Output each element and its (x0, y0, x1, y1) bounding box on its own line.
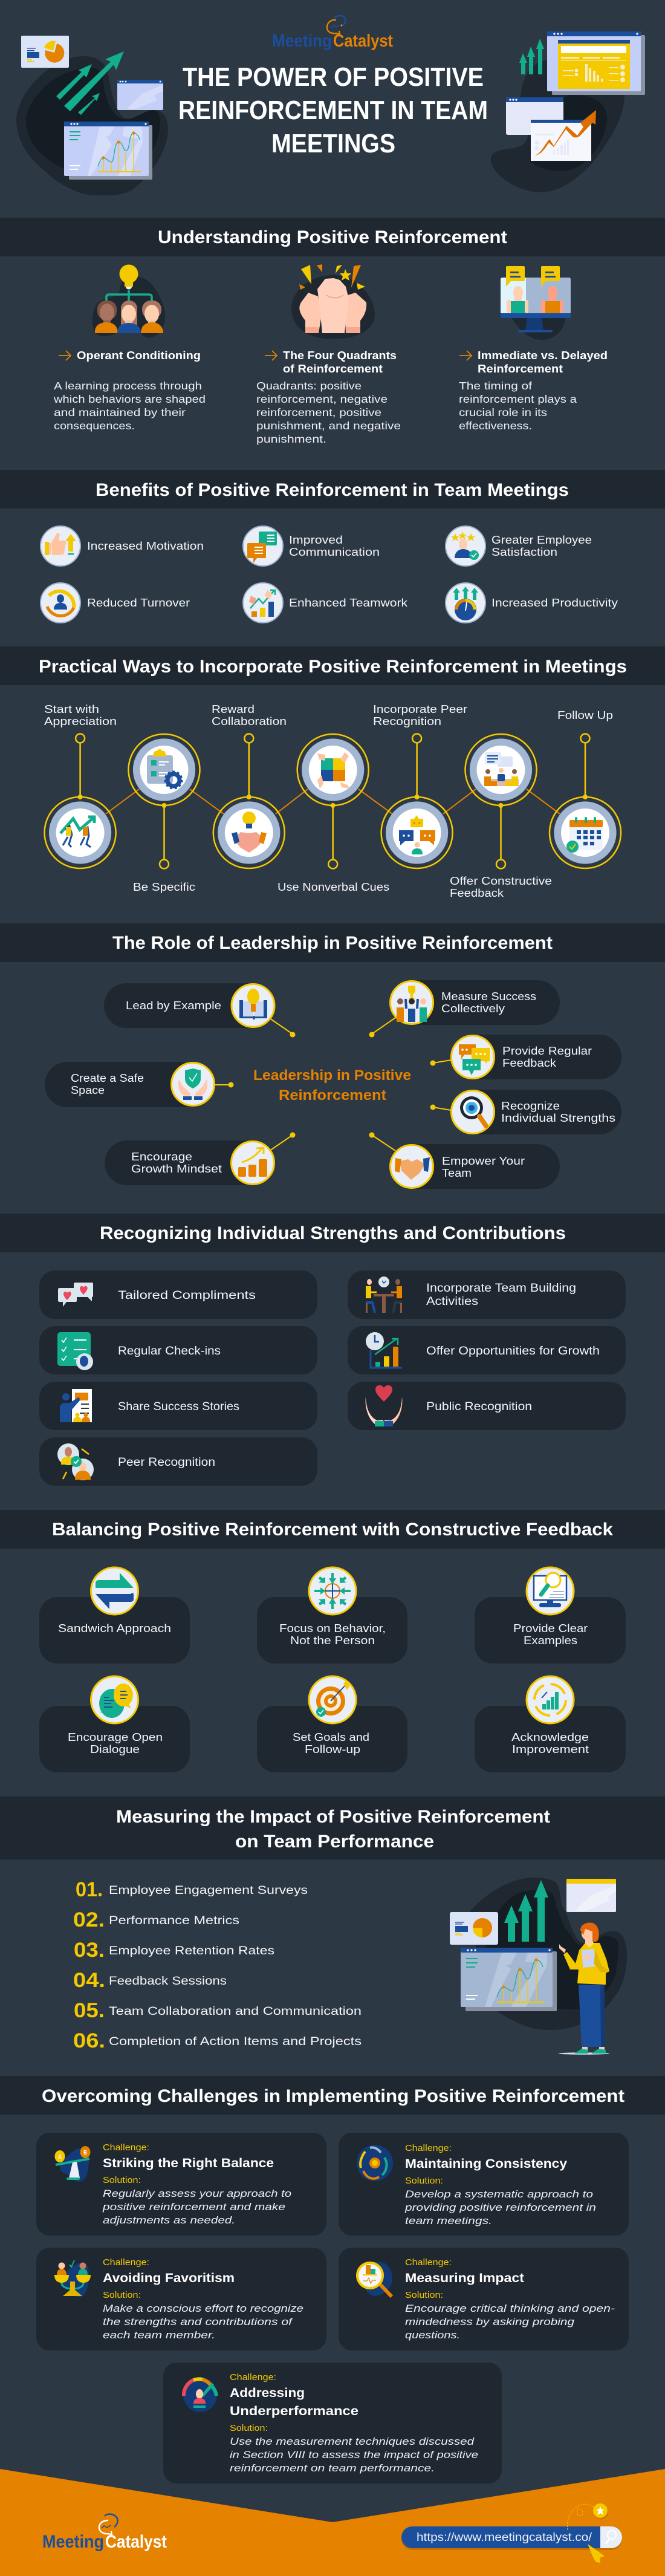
logo: Meeting Catalyst: Meeting (272, 31, 332, 51)
list item 06: 06. (73, 2029, 105, 2052)
footer band (0, 2469, 665, 2576)
card: Maintaining Consistency: Maintaining Consistency (405, 2157, 567, 2171)
icon: balance scale: A (58, 2154, 62, 2161)
icon: balance scale (54, 2146, 91, 2182)
list item 02: Performance Metrics (109, 1914, 239, 1927)
section: Practical Ways (0, 646, 665, 899)
benefit label: Greater Employee (491, 534, 592, 546)
list item 05 (74, 1999, 362, 2022)
list item 06: Completion of Action Items and Projects (109, 2035, 362, 2048)
card: Striking the Right Balance (36, 2133, 326, 2236)
card: Encourage Open Dialogue (39, 1676, 190, 1772)
node: Offer Constructive Feedback (465, 734, 537, 805)
card: Encourage Open Dialogue: Dialogue (90, 1743, 140, 1755)
list item 05: 05. (74, 1999, 105, 2022)
center label: Reinforcement (279, 1087, 386, 1104)
text block: The Four Quadrants of Reinforcement: punishment, and negative (256, 420, 401, 432)
center label (253, 1067, 411, 1104)
benefit label: Increased Productivity (491, 597, 618, 609)
connectors (215, 1018, 451, 1151)
card: Measuring Impact: Challenge: (405, 2257, 452, 2268)
text block: Immediate vs. Delayed Reinforcement: crucial role in its (459, 406, 547, 418)
text block: The Four Quadrants of Reinforcement: punishment. (256, 433, 326, 445)
pill: Encourage Growth Mindset: Growth Mindset (131, 1163, 222, 1175)
list item 05: Team Collaboration and Communication (109, 2005, 362, 2018)
pill: Encourage Growth Mindset (105, 1140, 274, 1185)
footer logo (42, 2514, 167, 2552)
benefit: Improved Communication (243, 526, 283, 566)
card: Addressing Underperformance: Addressing (230, 2386, 305, 2400)
text block: The Four Quadrants of Reinforcement (256, 350, 401, 445)
card: Maintaining Consistency (339, 2133, 629, 2236)
card: Addressing Underperformance: Challenge: (230, 2372, 276, 2382)
footer logo: Meeting (42, 2532, 104, 2552)
footer logo: Catalyst (105, 2532, 167, 2552)
text block: Operant Conditioning: Operant Conditioning (77, 350, 201, 362)
icon: cycle (357, 2145, 393, 2181)
card: Measuring Impact: questions. (405, 2329, 460, 2341)
benefit label: Increased Motivation (87, 540, 204, 552)
card: Avoiding Favoritism: each team member. (103, 2329, 215, 2341)
card: Tailored Compliments: Tailored Compliments (118, 1289, 256, 1302)
pill: Empower Your Team: Team (442, 1167, 472, 1179)
text block: The Four Quadrants of Reinforcement: of Reinforcement (283, 363, 383, 375)
card: Offer Opportunities for Growth (348, 1326, 626, 1374)
list item 03 (74, 1939, 274, 1962)
heading: Understanding Positive Reinforcement (158, 227, 507, 247)
pill: Create a Safe Space: Space (71, 1084, 105, 1096)
icon: scales with people (54, 2260, 91, 2297)
node: Incorporate Peer Recognition (381, 797, 453, 868)
card: Acknowledge Improvement (475, 1676, 626, 1772)
labels above: Collaboration (212, 715, 287, 727)
heading: The Role of Leadership in Positive Reinforcement (112, 933, 553, 953)
logo: Meeting Catalyst: Catalyst (333, 31, 393, 51)
node: Start with Appreciation (45, 797, 116, 868)
benefit label (289, 534, 380, 558)
icon: cursor (588, 2544, 605, 2563)
card: Incorporate Team Building Activities: Activities (426, 1295, 478, 1308)
labels below: Use Nonverbal Cues (277, 881, 389, 893)
heading: Balancing Positive Reinforcement with Constructive Feedback (52, 1520, 613, 1540)
text block: The Four Quadrants of Reinforcement: reinforcement, positive (256, 406, 381, 418)
list item 01: 01. (76, 1878, 103, 1901)
arrow (265, 351, 277, 360)
section: The Role of Leadership (0, 923, 665, 1189)
benefit label (491, 534, 592, 558)
pill: Encourage Growth Mindset: Encourage (131, 1151, 192, 1163)
section: Benefits of Positive Reinforcement (0, 470, 665, 623)
card: Offer Opportunities for Growth: Offer Opportunities for Growth (426, 1345, 600, 1358)
icon: balance scale: B (83, 2150, 87, 2156)
text block: Operant Conditioning: and maintained by their (54, 406, 186, 418)
labels above: Start with (44, 703, 99, 715)
card: Peer Recognition: Peer Recognition (118, 1456, 215, 1469)
pill: Create a Safe Space (45, 1062, 214, 1107)
logo: Meeting Catalyst (272, 16, 393, 51)
card: Focus on Behavior: Not the Person (290, 1634, 375, 1647)
labels above: Reward (212, 703, 255, 715)
title: THE POWER OF POSITIVE (183, 62, 484, 92)
list item 06 (73, 2029, 362, 2052)
card: Sandwich Approach (39, 1567, 190, 1664)
card: Striking the Right Balance: positive reinforcement and make (102, 2201, 285, 2213)
section: Recognizing Individual Strengths (0, 1214, 665, 1486)
card: Incorporate Team Building Activities: Incorporate Team Building (426, 1282, 576, 1295)
card: Avoiding Favoritism: the strengths and contributions of (103, 2316, 294, 2327)
hero illustration: right charts (491, 31, 645, 192)
pill: Empower Your Team: Empower Your (442, 1155, 525, 1167)
card: Encourage Open Dialogue: Encourage Open (68, 1731, 163, 1743)
pill: Provide Regular Feedback (451, 1035, 621, 1079)
list item 04: Feedback Sessions (109, 1975, 227, 1988)
section: Overcoming Challenges (0, 2076, 665, 2350)
text block: Immediate vs. Delayed Reinforcement (459, 350, 608, 432)
hero illustration: left charts (16, 36, 168, 195)
timeline connectors (76, 734, 590, 868)
section: Understanding Positive Reinforcement (0, 218, 665, 445)
pill: Measure Success Collectively: Collectively (441, 1003, 505, 1015)
benefit label: Improved (289, 534, 343, 546)
icon: video meeting monitor (501, 266, 571, 340)
card: Provide Clear Examples: Provide Clear (513, 1622, 588, 1634)
title: REINFORCEMENT IN TEAM (178, 96, 488, 125)
text block: The Four Quadrants of Reinforcement: The Four Quadrants (283, 350, 397, 362)
node: Use Nonverbal Cues (297, 734, 369, 805)
labels above: Incorporate Peer (373, 703, 467, 715)
website search bar (401, 2503, 622, 2563)
heading: Recognizing Individual Strengths and Contributions (100, 1223, 566, 1243)
card: Addressing Underperformance: Solution: (230, 2423, 268, 2433)
text block: Immediate vs. Delayed Reinforcement: Reinforcement (478, 363, 563, 375)
list item 04: 04. (73, 1969, 105, 1992)
title: MEETINGS (271, 129, 395, 158)
list item 03: 03. (74, 1939, 105, 1962)
card: Tailored Compliments (39, 1270, 317, 1319)
card: Provide Clear Examples (475, 1567, 626, 1664)
card: Public Recognition: Public Recognition (426, 1400, 532, 1413)
pill: Measure Success Collectively: Measure Success (441, 990, 536, 1003)
arrow (59, 351, 71, 360)
labels below (133, 875, 552, 899)
text block: Immediate vs. Delayed Reinforcement: reinforcement plays a (459, 393, 577, 405)
list item 03: Employee Retention Rates (109, 1945, 274, 1957)
card: Share Success Stories: Share Success Stories (118, 1400, 239, 1413)
heading: Benefits of Positive Reinforcement in Team Meetings (96, 480, 569, 500)
labels above (44, 703, 613, 727)
card: Striking the Right Balance: Regularly assess your approach to (103, 2188, 291, 2199)
pill: Lead by Example: Lead by Example (126, 1000, 221, 1012)
card: Avoiding Favoritism: Avoiding Favoritism (103, 2271, 235, 2285)
card: Maintaining Consistency: Develop a systematic approach to (405, 2188, 593, 2200)
pill: Measure Success Collectively (390, 980, 560, 1025)
text block: Operant Conditioning: consequences. (54, 420, 135, 432)
pill: Recognize Individual Strengths (451, 1090, 621, 1134)
card: Measuring Impact: Measuring Impact (405, 2271, 524, 2285)
card: Regular Check-ins (39, 1326, 317, 1374)
card: Avoiding Favoritism: Challenge: (103, 2257, 149, 2268)
card: Measuring Impact: Encourage critical thinking and open- (405, 2303, 615, 2314)
card: Addressing Underperformance (163, 2363, 502, 2483)
pill: Empower Your Team (390, 1144, 560, 1189)
card: Maintaining Consistency: Challenge: (405, 2143, 452, 2153)
card: Focus on Behavior (257, 1567, 407, 1664)
card: Provide Clear Examples: Examples (524, 1634, 577, 1647)
section: Measuring the Impact (0, 1797, 665, 2055)
card: Incorporate Team Building Activities (348, 1270, 626, 1319)
text block: Immediate vs. Delayed Reinforcement: Immediate vs. Delayed (478, 350, 608, 362)
card: Acknowledge Improvement: Acknowledge (511, 1731, 589, 1743)
heading: Measuring the Impact of Positive Reinforcement (116, 1807, 550, 1827)
card: Addressing Underperformance: in Section VIII to assess the impact of positive (230, 2449, 478, 2461)
card: Avoiding Favoritism: Make a conscious effort to recognize (103, 2303, 303, 2314)
benefit: Enhanced Teamwork (243, 583, 283, 623)
benefit: Increased Motivation (41, 526, 80, 566)
title (178, 62, 488, 158)
card: Avoiding Favoritism (36, 2248, 326, 2350)
benefit: Reduced Turnover (41, 583, 80, 623)
benefit label: Enhanced Teamwork (289, 597, 408, 609)
text block: Immediate vs. Delayed Reinforcement: effectiveness. (459, 420, 532, 432)
labels below: Be Specific (133, 881, 195, 893)
text block: Immediate vs. Delayed Reinforcement: The timing of (459, 380, 532, 392)
benefit label: Communication (289, 546, 380, 558)
card: Peer Recognition (39, 1437, 317, 1486)
card: Striking the Right Balance: Striking the Right Balance (103, 2156, 274, 2170)
labels above: Recognition (373, 715, 441, 727)
text block: The Four Quadrants of Reinforcement: reinforcement, negative (256, 393, 388, 405)
card: Addressing Underperformance: reinforcement on team performance. (230, 2462, 435, 2474)
list item 04 (73, 1969, 227, 1992)
text block: The Four Quadrants of Reinforcement: Quadrants: positive (256, 380, 362, 392)
card: Maintaining Consistency: Solution: (405, 2176, 443, 2186)
card: Striking the Right Balance: Challenge: (103, 2142, 149, 2153)
node: Follow Up (550, 797, 621, 868)
labels above: Follow Up (557, 709, 613, 721)
website search bar: https://www.meetingcatalyst.co/ (417, 2531, 592, 2544)
card: Sandwich Approach: Sandwich Approach (58, 1622, 171, 1634)
list item 02: 02. (73, 1908, 105, 1931)
labels above: Appreciation (44, 715, 117, 727)
benefit: Greater Employee Satisfaction (446, 526, 485, 566)
benefit label: Satisfaction (491, 546, 557, 558)
illustration: woman presenting charts (450, 1878, 627, 2055)
card: Addressing Underperformance: Underperformance (230, 2404, 358, 2418)
labels below: Feedback (450, 887, 504, 899)
card: Set Goals and Follow-up: Follow-up (305, 1743, 360, 1755)
card: Avoiding Favoritism: Solution: (103, 2290, 141, 2300)
heading: on Team Performance (235, 1832, 434, 1852)
card: Regular Check-ins: Regular Check-ins (118, 1345, 221, 1358)
heading: Practical Ways to Incorporate Positive Reinforcement in Meetings (39, 657, 627, 677)
pill: Provide Regular Feedback: Feedback (502, 1057, 557, 1069)
pill: Lead by Example (104, 983, 274, 1028)
card: Measuring Impact: Solution: (405, 2290, 443, 2300)
card: Addressing Underperformance: Use the measurement techniques discussed (230, 2436, 475, 2447)
card: Measuring Impact: mindedness by asking probing (405, 2316, 575, 2327)
pill: Create a Safe Space: Create a Safe (71, 1072, 144, 1084)
card: Public Recognition (348, 1382, 626, 1430)
heading: Overcoming Challenges in Implementing Positive Reinforcement (42, 2086, 624, 2106)
card: Maintaining Consistency: team meetings. (405, 2215, 492, 2226)
card: Striking the Right Balance: Solution: (103, 2175, 141, 2185)
text block: Operant Conditioning (53, 350, 206, 432)
icon: team with light bulb (92, 265, 165, 337)
benefit: Increased Productivity (446, 583, 485, 623)
pill: Provide Regular Feedback: Provide Regular (502, 1045, 592, 1057)
card: Acknowledge Improvement: Improvement (512, 1743, 589, 1755)
center label: Leadership in Positive (253, 1067, 411, 1084)
node: Reward Collaboration (213, 797, 285, 868)
icon: magnifier with chart (357, 2262, 392, 2297)
pill: Recognize Individual Strengths: Recognize (501, 1100, 560, 1112)
card: Set Goals and Follow-up: Set Goals and (293, 1731, 369, 1743)
section: Balancing Positive Reinforcement (0, 1510, 665, 1772)
icon: star coin with dashed trail (568, 2503, 608, 2530)
pill: Recognize Individual Strengths: Individual Strengths (501, 1112, 615, 1124)
card: Striking the Right Balance: adjustments as needed. (103, 2214, 235, 2226)
arrow (459, 351, 472, 360)
text block: Operant Conditioning: A learning process through (54, 380, 202, 392)
card: Maintaining Consistency: providing positive reinforcement in (404, 2202, 596, 2213)
node: Be Specific (128, 734, 199, 805)
card: Set Goals and Follow-up (257, 1676, 407, 1772)
text block: Operant Conditioning: which behaviors are shaped (53, 393, 206, 405)
benefit label: Reduced Turnover (87, 597, 190, 609)
card: Measuring Impact (339, 2248, 629, 2350)
icon: raised fists (291, 264, 375, 339)
list item 01: Employee Engagement Surveys (109, 1884, 308, 1897)
icon: gauge with person (183, 2377, 217, 2412)
card: Focus on Behavior: Focus on Behavior, (279, 1622, 386, 1634)
list item 02 (73, 1908, 239, 1931)
labels below: Offer Constructive (450, 875, 552, 887)
heading (116, 1807, 550, 1852)
card: Share Success Stories (39, 1382, 317, 1430)
list item 01 (76, 1878, 308, 1901)
